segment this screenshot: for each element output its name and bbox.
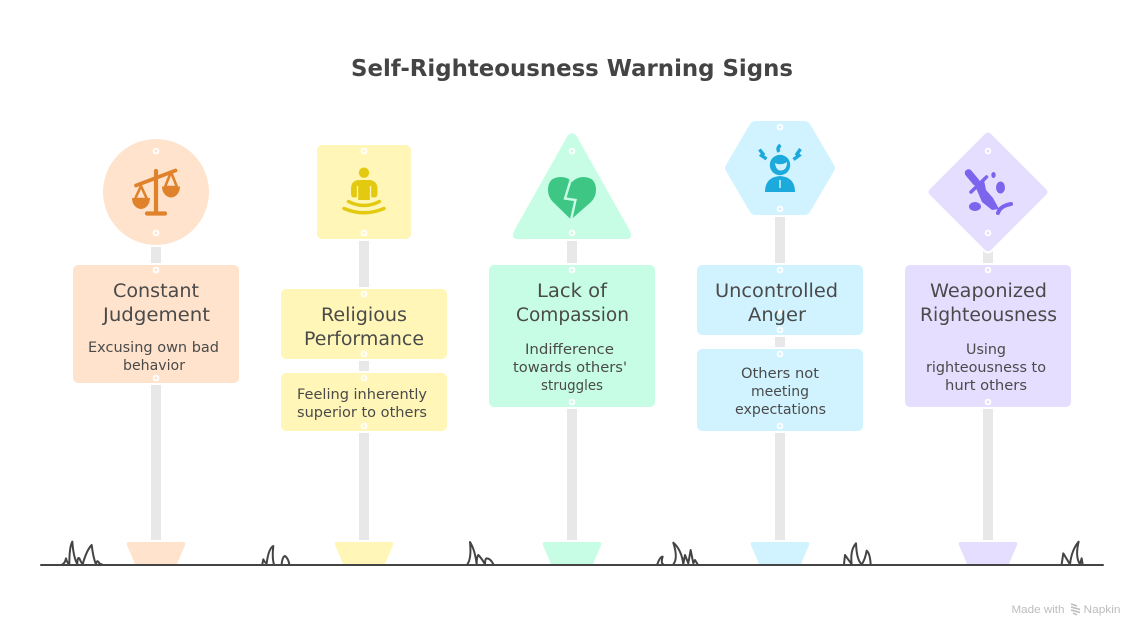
card: Weaponized Righteousness: righteousness to — [926, 360, 1046, 376]
base — [751, 542, 809, 564]
warning sign 2: Religious Performance — [281, 145, 447, 564]
card: Religious Performance — [281, 289, 447, 359]
card: Weaponized Righteousness: Weaponized — [930, 281, 1047, 302]
ground line with grass — [41, 542, 1103, 565]
card: Uncontrolled Anger: Anger — [748, 305, 806, 326]
card: Lack of Compassion: towards others' — [513, 360, 627, 376]
card: Feeling inherently superior: Feeling inherently — [297, 387, 427, 403]
mounting holes — [153, 148, 159, 236]
hexagon sign board — [725, 121, 835, 215]
square sign board — [317, 145, 411, 239]
icon: bloody dagger — [968, 172, 1011, 213]
warning sign 1: Constant Judgement — [73, 139, 239, 564]
mounting holes — [361, 148, 367, 236]
icon: angry person — [760, 145, 800, 192]
card: Weaponized Righteousness — [905, 265, 1071, 407]
card: Others not meeting expectations: meeting — [751, 384, 809, 400]
card: Weaponized Righteousness: Righteousness — [920, 305, 1057, 326]
triangle sign board — [513, 133, 631, 239]
base — [127, 542, 185, 564]
post — [567, 235, 577, 540]
card: Constant Judgement: Judgement — [102, 305, 210, 326]
watermark: Made with Napkin: Made with — [1012, 604, 1064, 616]
card: Uncontrolled Anger: Uncontrolled — [715, 281, 838, 302]
card: Constant Judgement: Constant — [113, 281, 199, 302]
icon: meditating person — [344, 168, 384, 213]
card: Lack of Compassion: Indifference — [525, 342, 614, 358]
card: Lack of Compassion: struggles — [541, 378, 603, 394]
mounting holes — [985, 148, 991, 236]
title: Self-Righteousness Warning Signs — [351, 56, 793, 82]
card: Constant Judgement — [73, 265, 239, 383]
card: Others not meeting expectations: expectations — [735, 402, 826, 418]
base — [543, 542, 601, 564]
base — [335, 542, 393, 564]
post — [359, 235, 369, 540]
post — [775, 210, 785, 540]
card: Uncontrolled Anger — [697, 265, 863, 335]
card: Others not meeting expectations: Others not — [741, 366, 820, 382]
icon: Napkin logo — [1071, 604, 1080, 615]
round sign board — [103, 139, 209, 245]
card: Religious Performance: Religious — [321, 305, 407, 326]
card: Weaponized Righteousness: hurt others — [945, 378, 1027, 394]
card: Lack of Compassion: Lack of — [537, 281, 608, 302]
card: Weaponized Righteousness: Using — [966, 342, 1006, 358]
post — [983, 240, 993, 540]
icon: balance scales — [132, 170, 180, 214]
card: Feeling inherently superior — [281, 373, 447, 431]
card: Feeling inherently superior: superior to others — [297, 405, 427, 421]
card: Lack of Compassion — [489, 265, 655, 407]
post — [151, 240, 161, 540]
card: Others not meeting expectations — [697, 349, 863, 431]
icon: broken heart — [548, 177, 596, 220]
mounting holes — [569, 148, 575, 236]
card: Constant Judgement: behavior — [123, 358, 185, 374]
diamond sign board — [928, 132, 1048, 252]
base — [959, 542, 1017, 564]
card: Lack of Compassion: Compassion — [516, 305, 629, 326]
watermark: Made with Napkin — [1012, 604, 1120, 616]
warning sign 4: Uncontrolled Anger — [697, 121, 863, 564]
card: Religious Performance: Performance — [304, 329, 424, 350]
warning sign 3: Lack of Compassion — [489, 133, 655, 564]
mounting holes — [777, 124, 783, 212]
card: Constant Judgement: Excusing own bad — [88, 340, 219, 356]
warning sign 5: Weaponized Righteousness — [905, 132, 1071, 564]
watermark: Made with Napkin: Napkin — [1084, 604, 1120, 616]
